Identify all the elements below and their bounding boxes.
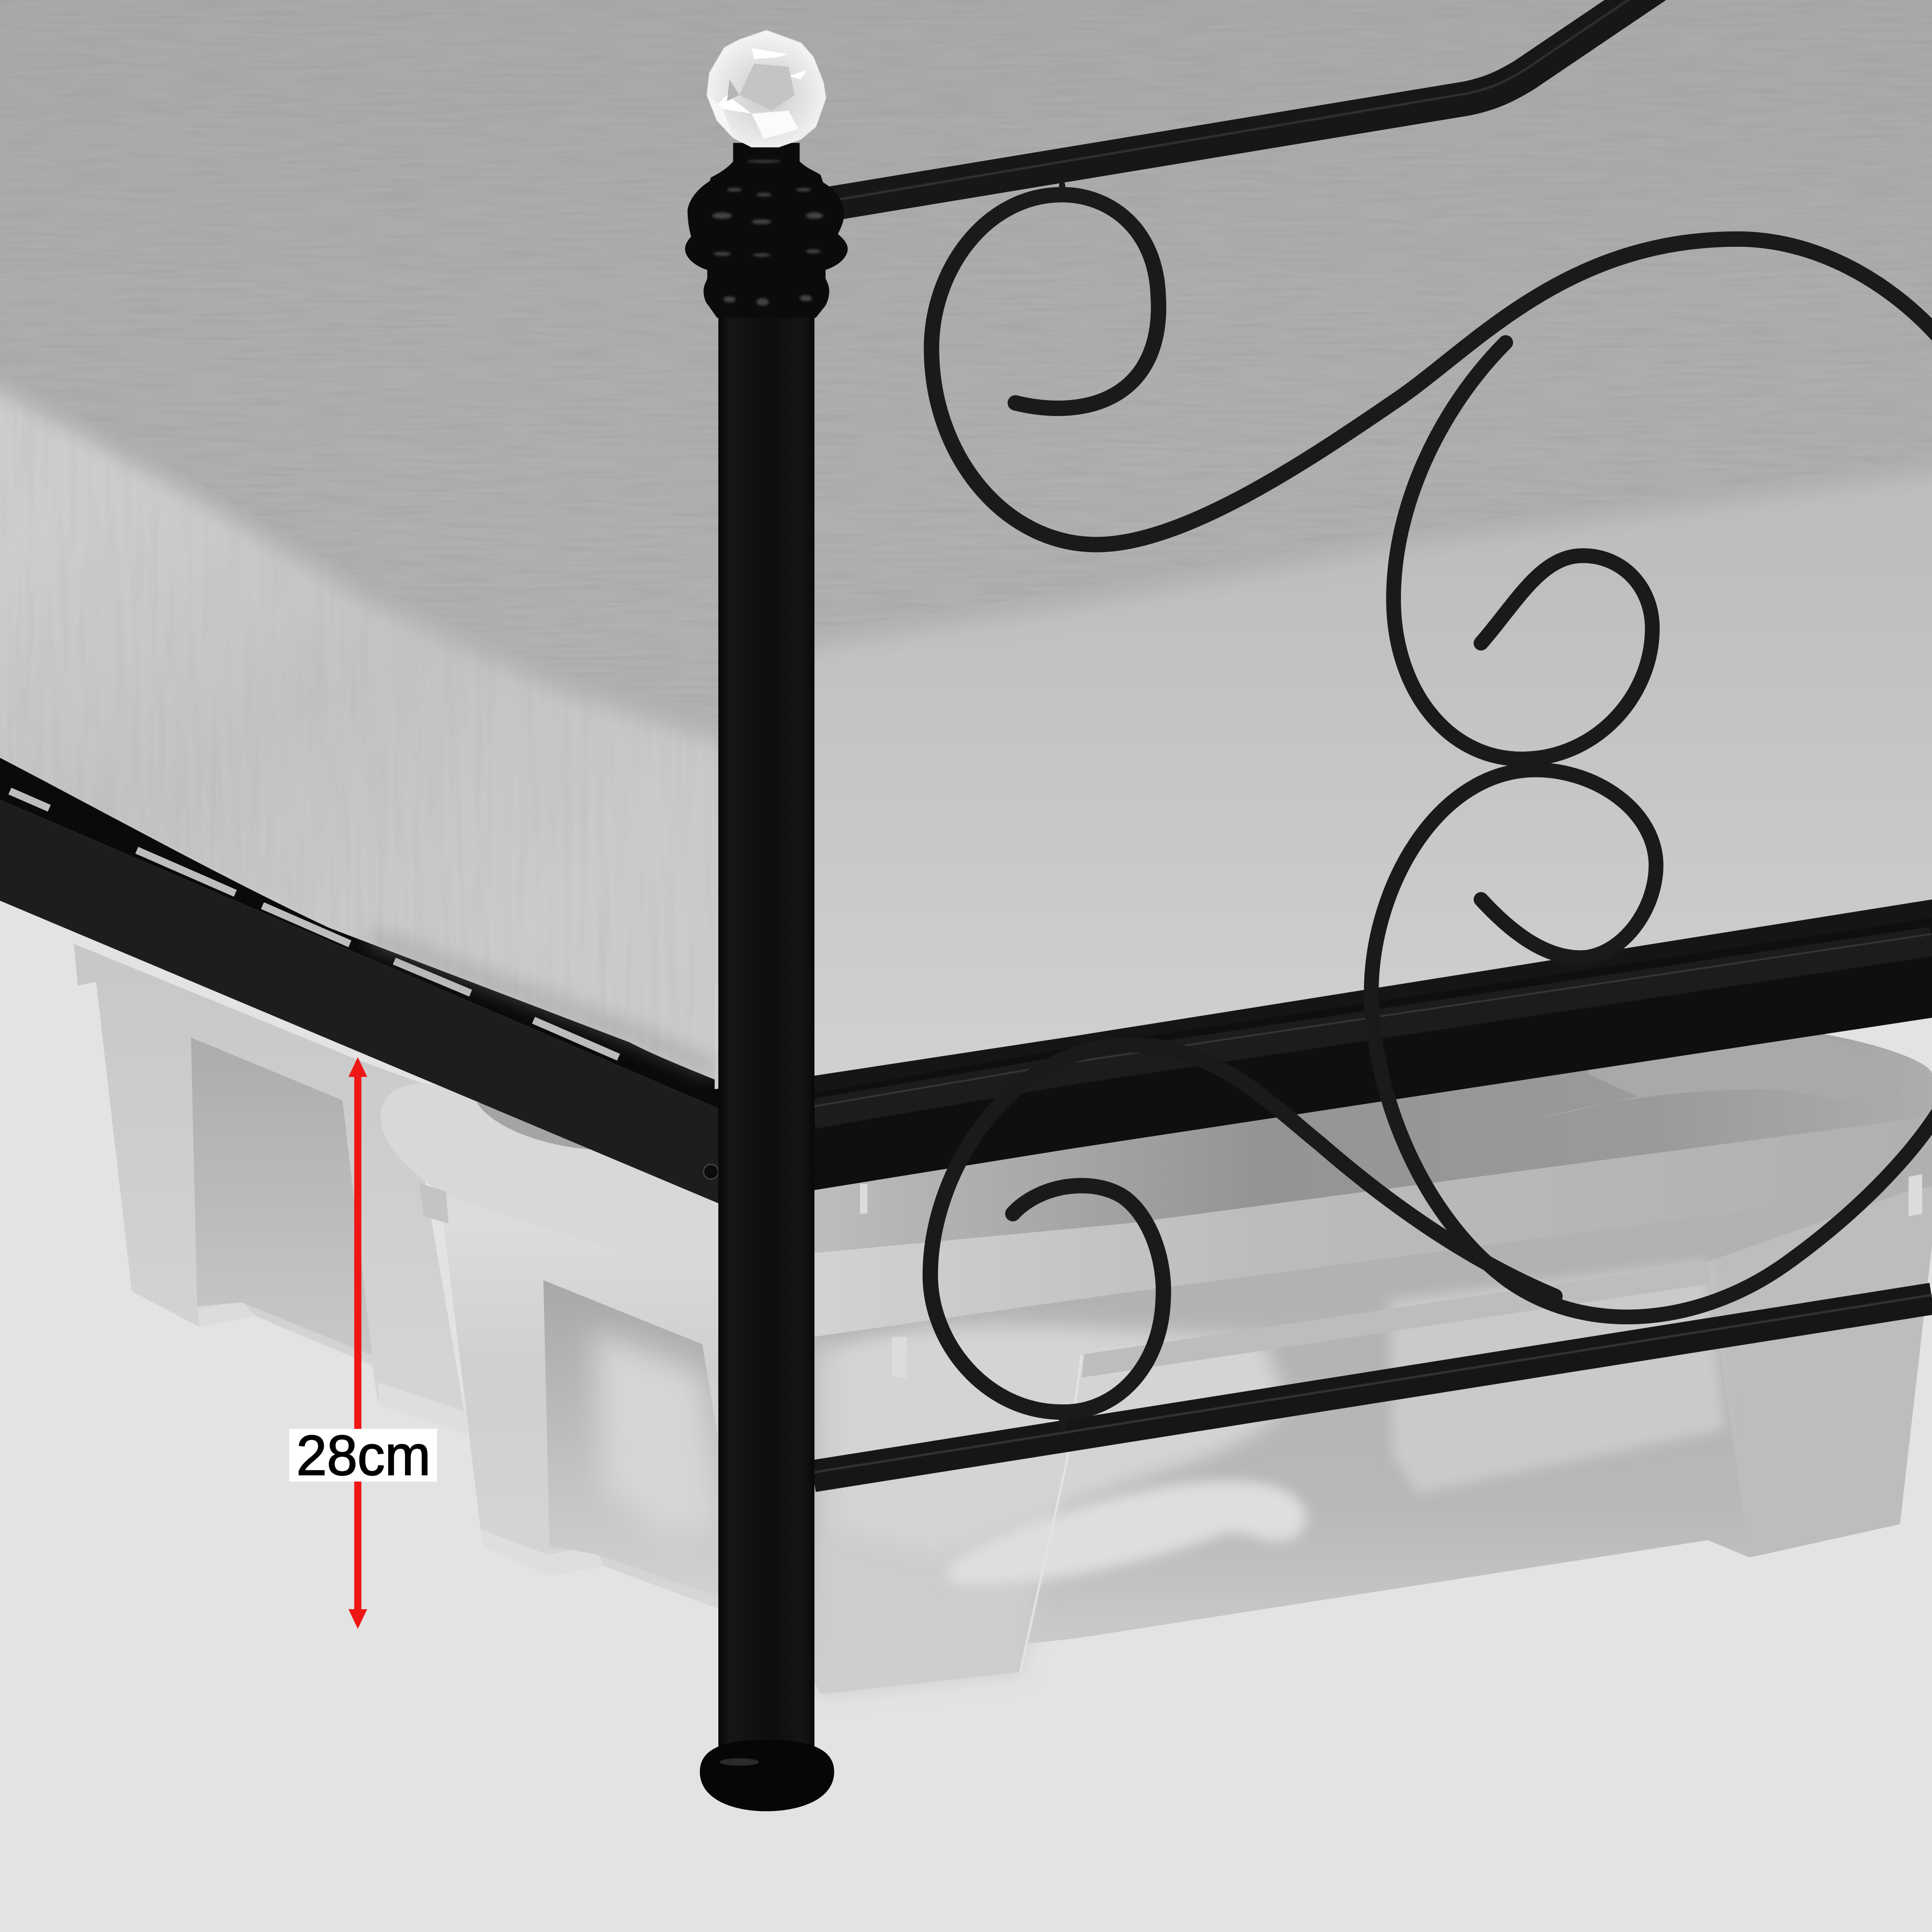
mattress left side face (0, 370, 739, 1089)
end rail (813, 918, 1932, 1190)
box body right part (813, 1158, 1932, 1694)
scrollwork (930, 185, 1932, 1429)
right end facet (1708, 1183, 1932, 1558)
front storage box with blankets (381, 1025, 1932, 1694)
upper left scroll (932, 194, 1932, 544)
top rail (833, 0, 1657, 204)
bed frame rails (0, 800, 1932, 1204)
mattress right side face (715, 456, 1932, 1089)
side rail (0, 800, 720, 1204)
corner tab (419, 1183, 449, 1224)
rear box lower lip (378, 1382, 468, 1434)
lower left scroll (930, 1045, 1555, 1412)
rear box foot lip (132, 1289, 255, 1327)
box recess (544, 1280, 720, 1597)
lid underside tray shadow (477, 1103, 592, 1150)
finial base (685, 143, 848, 318)
upper right scroll (1394, 343, 1653, 759)
blanket right (1390, 1262, 1725, 1493)
mattress top texture (0, 0, 1932, 863)
rear box recess (191, 1037, 372, 1355)
right rail gap (814, 895, 1932, 1099)
side rail bolt (704, 1164, 718, 1179)
mattress left face streaks (0, 370, 764, 1109)
lower rail (813, 1295, 1932, 1476)
post shaft (718, 308, 814, 1756)
rear box body (74, 944, 468, 1434)
end rail tube (813, 942, 1932, 1114)
mattress (0, 0, 1932, 1109)
blanket fold (949, 1481, 1306, 1584)
small box tabs (860, 1174, 1922, 1379)
box body left part (441, 1194, 720, 1609)
dimension label: 28cm (296, 1423, 431, 1487)
lid rim band right (813, 1116, 1932, 1337)
blanket left (838, 1324, 1288, 1552)
lid tray (1539, 1025, 1899, 1119)
rear storage box (74, 944, 468, 1434)
slat gap under mattress (0, 749, 720, 1109)
mattress bottom shadow (370, 936, 715, 1069)
post foot (700, 1740, 834, 1811)
lid left (381, 1083, 720, 1284)
scroll joints (1062, 185, 1528, 1429)
finial highlights (712, 160, 823, 306)
mattress top surface (0, 0, 1932, 745)
crystal knob (707, 31, 826, 146)
box foot lip (480, 1529, 604, 1576)
middle right scroll (1371, 770, 1932, 1317)
recess blanket glow (594, 1331, 720, 1540)
lid surface right (813, 1025, 1932, 1257)
front panel lighter area (813, 1343, 1082, 1694)
dimension arrow: under-bed height (349, 1057, 367, 1629)
bed post (685, 31, 848, 1811)
clear divider panel (1082, 1262, 1710, 1378)
foot highlight (720, 1758, 759, 1766)
